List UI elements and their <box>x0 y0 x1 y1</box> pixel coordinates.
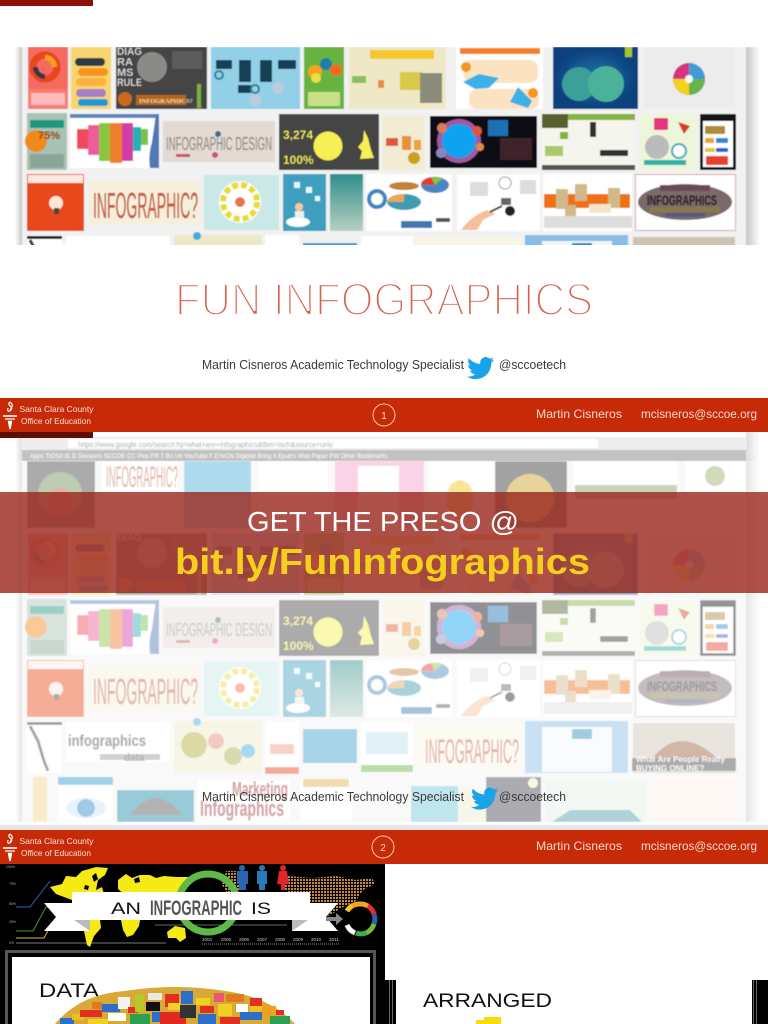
frame and data panel <box>5 950 376 1024</box>
icon: twitter bird <box>471 788 498 810</box>
lego pile <box>55 987 295 1024</box>
year labels <box>202 938 339 941</box>
header bar: slide 2: Office of Education <box>21 848 91 858</box>
dotted map <box>222 871 375 916</box>
slide number 2 <box>372 836 394 858</box>
panel: infographic search screenshot, top slide: 100% <box>283 153 314 167</box>
presenter line <box>202 357 566 379</box>
ribbon banner <box>44 892 338 931</box>
year labels: 2010 <box>311 937 322 942</box>
panel: infographic search screenshot, top slide: DIAG <box>117 46 142 58</box>
header bar: slide 2: mcisneros@sccoe.org <box>641 839 757 853</box>
header bar: slide 1: mcisneros@sccoe.org <box>641 407 757 421</box>
panel: an infographic is, slide 2: 50% <box>9 902 16 906</box>
presenter line: @sccoetech <box>499 358 566 372</box>
panel: faded browser screenshot, slide 1 <box>15 432 760 833</box>
lower results row <box>33 777 47 822</box>
panel: faded browser screenshot, slide 1: infographics <box>68 733 146 750</box>
panel: faded browser screenshot, slide 1: INFOGRAPHIC DESIGN <box>166 620 272 640</box>
arrow <box>326 913 343 925</box>
panel: faded browser screenshot, slide 1: data <box>124 753 145 764</box>
panel: faded browser screenshot, slide 1: Infographics <box>200 796 284 821</box>
arranged panel: ARRANGED <box>423 990 552 1012</box>
panel: infographic search screenshot, top slide: INFOGRAPHICS? <box>139 98 193 105</box>
year labels: 2007 <box>257 937 268 942</box>
panel: an infographic is, slide 2: 100% <box>6 865 15 869</box>
panel: infographic search screenshot, top slide: 75% <box>38 130 60 142</box>
panel: infographic search screenshot, top slide: INFOGRAPHIC? <box>93 185 198 226</box>
panel: faded browser screenshot, slide 1: 100% <box>283 639 314 653</box>
banner: get the preso: bit.ly/FunInfographics <box>175 541 590 582</box>
panel: an infographic is, slide 2: 0% <box>9 941 14 945</box>
title: FUN INFOGRAPHICS <box>175 274 593 325</box>
accent tab: slide 1 dark red bar <box>0 432 93 438</box>
panel: infographic search screenshot, top slide: INFOGRAPHICS <box>647 192 717 208</box>
banner: get the preso <box>0 492 768 593</box>
header bar: slide 1: Santa Clara County <box>20 404 94 414</box>
presenter line, slide 1: Martin Cisneros Academic Technology Specialist <box>202 790 465 804</box>
panel: infographic search screenshot, top slide: RA <box>117 56 133 68</box>
header bar: slide 1 <box>0 398 768 432</box>
icon: torch logo <box>3 402 17 429</box>
icon: people <box>237 865 289 890</box>
ribbon banner: AN <box>111 899 141 918</box>
panel: infographic search screenshot, top slide: RULE <box>117 77 142 89</box>
header bar: slide 1: Martin Cisneros <box>536 407 622 421</box>
panel: infographic search screenshot, top slide: INFOGRAPHIC DESIGN <box>166 134 272 154</box>
slide number 1: 1 <box>381 411 387 422</box>
yellow block <box>476 1017 501 1024</box>
panel: infographic search screenshot, top slide <box>16 47 758 245</box>
panel: an infographic is, slide 2 <box>0 864 768 1024</box>
top results row <box>27 461 95 528</box>
header bar: slide 2 <box>0 830 768 864</box>
chart: line axes <box>16 881 339 944</box>
slide number 2: 2 <box>380 843 386 854</box>
panel: faded browser screenshot, slide 1: INFOGRAPHIC? <box>93 671 198 712</box>
header bar: slide 1: Office of Education <box>21 416 91 426</box>
header bar: slide 2: Santa Clara County <box>20 836 94 846</box>
panel: faded browser screenshot, slide 1: Marketing <box>232 779 288 801</box>
icon: colour donut <box>347 904 375 934</box>
banner: get the preso: GET THE PRESO @ <box>247 506 519 537</box>
year labels: 2004 <box>202 937 213 942</box>
panel: infographic search screenshot, top slide: MS <box>117 67 134 79</box>
browser chrome: Apps TIOSA IE D Sessions SCCOE CC Plus PR T Bo Un YouTube F EYeCN Digiplat Bring It Epub's Web Paper PW Other Bookmarks <box>30 454 387 460</box>
year labels: 2008 <box>275 937 286 942</box>
presenter line: Martin Cisneros Academic Technology Specialist <box>202 358 465 372</box>
panel: faded browser screenshot, slide 1: INFOGRAPHIC? <box>106 461 178 494</box>
arranged panel <box>423 994 551 1024</box>
panel: faded browser screenshot, slide 1: BUYING ONLINE? <box>636 764 705 773</box>
browser chrome <box>22 437 746 461</box>
panel: infographic search screenshot, top slide: 3,274 <box>283 128 313 142</box>
ribbon banner: INFOGRAPHIC <box>150 897 242 920</box>
year labels: 2011 <box>329 937 339 942</box>
panel: faded browser screenshot, slide 1: INFOGRAPHIC? <box>425 733 519 771</box>
accent tab: top red bar <box>0 0 93 6</box>
year labels: 2009 <box>293 937 304 942</box>
frame and data panel: DATA <box>39 980 99 1002</box>
green ring <box>179 874 237 932</box>
panel: faded browser screenshot, slide 1: DIAG <box>117 532 142 544</box>
panel: faded browser screenshot, slide 1: What Are People Really <box>636 755 726 764</box>
panel: faded browser screenshot, slide 1: 3,274 <box>283 614 313 628</box>
browser chrome: https://www.google.com/search?q=what+are+infographics&tbm=isch&source=univ <box>78 442 334 449</box>
year labels: 2006 <box>239 937 250 942</box>
header bar: slide 2: Martin Cisneros <box>536 839 622 853</box>
band below screenshot <box>0 825 768 830</box>
world map <box>50 867 193 947</box>
panel: faded browser screenshot, slide 1: INFOGRAPHICS <box>647 678 717 694</box>
panel: an infographic is, slide 2: 25% <box>9 920 16 924</box>
year labels: 2005 <box>221 937 232 942</box>
presenter line, slide 1 <box>202 788 566 810</box>
ribbon banner: IS <box>251 899 271 918</box>
icon: torch logo <box>3 834 17 861</box>
presenter line, slide 1: @sccoetech <box>499 790 566 804</box>
icon: twitter bird <box>467 357 494 379</box>
slide number 1 <box>373 404 395 426</box>
panel: an infographic is, slide 2: 75% <box>9 882 16 886</box>
